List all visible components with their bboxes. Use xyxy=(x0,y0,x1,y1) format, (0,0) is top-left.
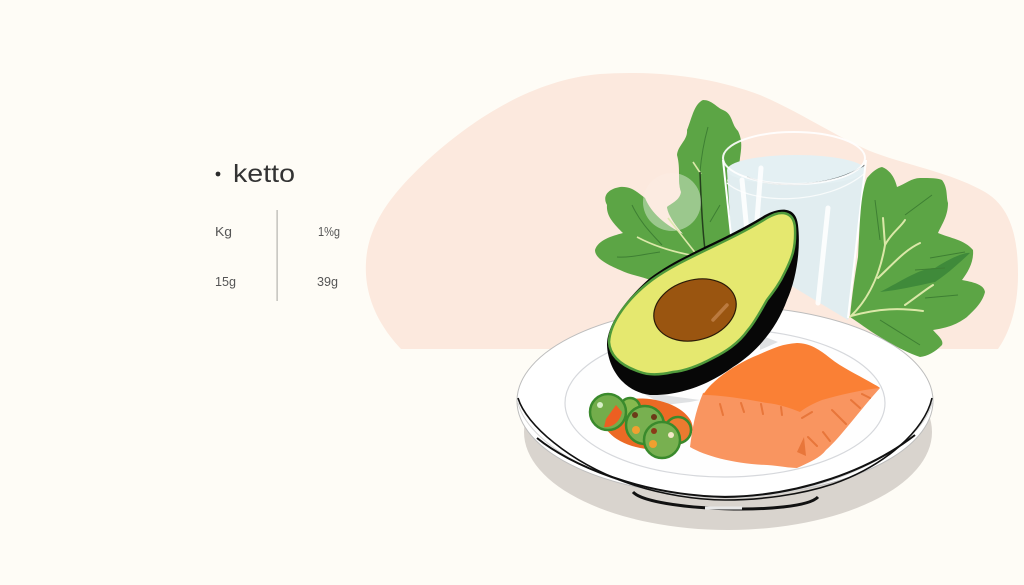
nutrition table: Kg xyxy=(215,224,232,239)
heading: ketto xyxy=(216,160,295,188)
illustration: left leaves xyxy=(595,100,745,290)
illustration: plate shadow xyxy=(524,334,932,530)
illustration: plate xyxy=(517,306,933,509)
illustration: glass of water xyxy=(723,132,866,320)
nutrition table xyxy=(215,210,340,301)
illustration: right leaf xyxy=(850,167,985,357)
right leaf veins xyxy=(850,218,933,317)
nutrition table: 15g xyxy=(215,274,236,289)
nutrition table: 39g xyxy=(317,274,338,289)
avocado pit xyxy=(646,270,744,350)
nutrition table: 1%g xyxy=(318,224,340,239)
illustration: avocado xyxy=(607,210,799,395)
background blob xyxy=(366,73,1018,349)
salmon fat lines xyxy=(720,394,870,446)
heading: ketto: ketto xyxy=(233,160,295,188)
illustration: salmon xyxy=(690,343,880,468)
leaf veins xyxy=(617,127,720,257)
illustration: jalapeno slices xyxy=(590,394,691,458)
avocado flesh xyxy=(609,213,795,374)
translucent highlight circle xyxy=(643,173,701,231)
right leaf dark patch xyxy=(880,253,970,292)
illustration: sauce xyxy=(600,393,696,455)
